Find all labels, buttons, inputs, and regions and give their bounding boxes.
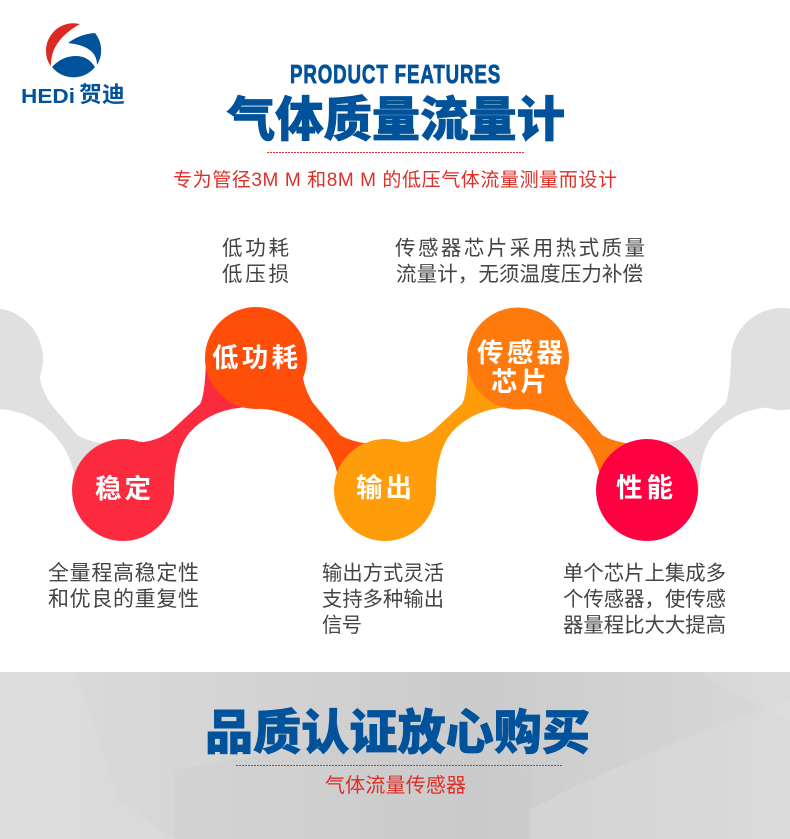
footer heading: 品质认证放心购买 (205, 707, 590, 760)
description: output: 支持多种输出 (322, 588, 444, 611)
right gray node (645, 308, 790, 495)
description: performance (563, 562, 726, 637)
node: low power: 低功耗 (212, 343, 298, 373)
node: performance: 性能 (616, 473, 673, 503)
node: performance (596, 439, 698, 541)
description: performance: 单个芯片上集成多 (563, 562, 726, 585)
description: sensor chip: 流量计，无须温度压力补偿 (396, 263, 643, 286)
node: output: 输出 (356, 473, 412, 503)
logo: wordmark Chinese: 贺迪 (79, 82, 125, 107)
node: stable: 稳定 (95, 474, 151, 504)
description: low power: 低压损 (222, 263, 289, 286)
connector: orange (512, 378, 632, 500)
description: performance: 器量程比大大提高 (563, 614, 726, 637)
node: sensor chip: 传感器 (477, 338, 564, 368)
footer band (0, 672, 790, 839)
logo: red crescent (46, 23, 80, 66)
node: sensor chip (467, 308, 569, 410)
description: stability: 和优良的重复性 (48, 588, 199, 611)
logo: blue lower swoosh (52, 56, 95, 77)
connector: red (120, 360, 250, 495)
connector: orange-red (250, 378, 370, 500)
subtitle: 专为管径3M M 和8M M 的低压气体流量测量而设计 (173, 169, 617, 191)
description: low power (222, 237, 289, 286)
description: stability (48, 562, 199, 611)
description: performance: 个传感器，使传感 (563, 588, 726, 611)
description: low power: 低功耗 (222, 237, 289, 260)
flow chart (0, 307, 790, 541)
node: low power (205, 307, 307, 409)
description: output: 信号 (322, 614, 362, 637)
description: stability: 全量程高稳定性 (48, 562, 199, 585)
node: stable (72, 439, 174, 541)
footer subtitle: 气体流量传感器 (325, 774, 466, 797)
logo (21, 23, 125, 108)
logo: blue upper swoosh (68, 33, 101, 65)
description: output: 输出方式灵活 (322, 562, 444, 585)
left gray node (0, 308, 107, 500)
description: output (322, 562, 444, 637)
heading: product features: PRODUCT FEATURES (290, 59, 500, 89)
node: output (334, 439, 436, 541)
node: sensor chip: 芯片 (491, 367, 547, 397)
title: 气体质量流量计 (227, 94, 565, 147)
logo: wordmark HEDi: HEDi (21, 86, 75, 108)
description: sensor chip (395, 237, 645, 286)
connector: amber (382, 360, 512, 495)
description: sensor chip: 传感器芯片采用热式质量 (395, 237, 645, 260)
